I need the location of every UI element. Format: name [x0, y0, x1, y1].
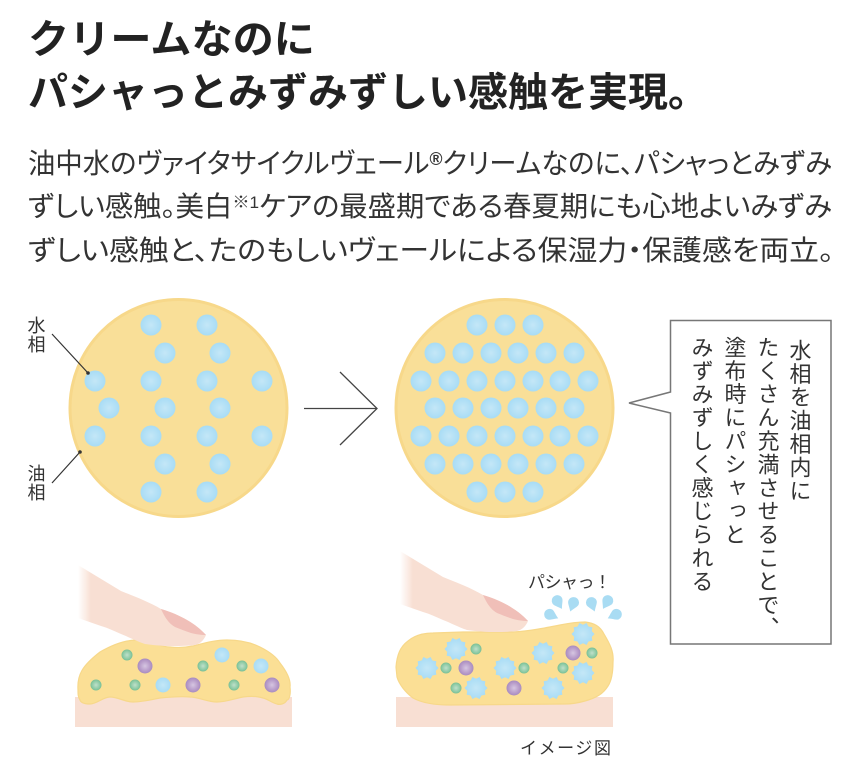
callout: 塗布時にパシャっと	[722, 336, 746, 547]
diagram: before, sparse water phase	[70, 300, 287, 516]
callout: みずみずしく感じられる	[688, 336, 714, 593]
label: water phase	[26, 316, 90, 375]
body text	[28, 148, 834, 266]
illustration: finger on cream, after	[396, 551, 613, 727]
illustration: finger on cream, before	[75, 565, 292, 727]
body text: ※1	[232, 193, 259, 212]
diagram: after, dense water phase	[396, 300, 613, 516]
title: パシャっとみずみずしい感触を実現。	[28, 71, 708, 115]
body text: クリームなのに、パシャっとみずみ	[442, 148, 832, 179]
splash droplets	[542, 593, 624, 623]
label: oil phase	[26, 450, 82, 502]
label: water phase: 水相	[26, 316, 46, 354]
title	[28, 18, 708, 115]
arrow	[304, 372, 377, 445]
callout: たくさん充満させることで、	[754, 336, 780, 640]
splash label: パシャっ！	[528, 573, 611, 592]
body text: ずしい感触。美白	[28, 191, 230, 222]
body text: 油中水のヴァイタサイクルヴェール	[28, 148, 439, 179]
body text: ケアの最盛期である春夏期にも心地よいみずみ	[259, 191, 832, 222]
body text: ずしい感触と、たのもしいヴェールによる保湿力・保護感を両立。	[28, 235, 834, 266]
callout	[629, 320, 831, 644]
caption: イメージ図	[520, 739, 611, 758]
label: oil phase: 油相	[26, 464, 46, 502]
callout: 水相を油相内に	[786, 339, 812, 503]
body text: ®	[429, 149, 442, 169]
title: クリームなのに	[28, 18, 315, 62]
